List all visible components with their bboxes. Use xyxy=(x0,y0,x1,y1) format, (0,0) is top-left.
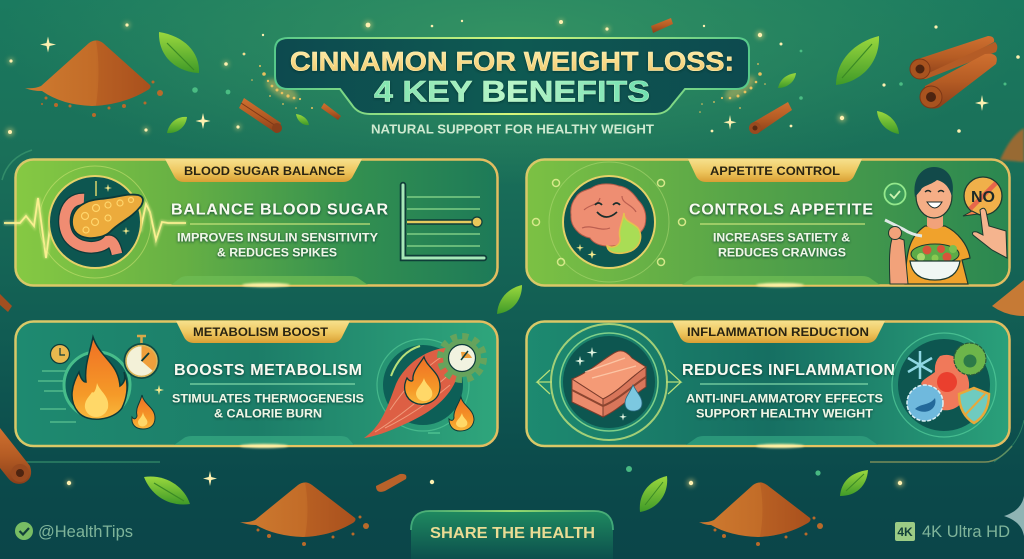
tab: APPETITE CONTROL xyxy=(710,164,840,178)
leaves xyxy=(144,32,899,512)
title line 1: CINNAMON FOR WEIGHT LOSS: xyxy=(290,47,734,77)
subtitle: NATURAL SUPPORT FOR HEALTHY WEIGHT xyxy=(371,122,654,136)
heading: REDUCES INFLAMMATION xyxy=(682,362,895,379)
tab xyxy=(688,159,862,182)
panel: inflammation reduction xyxy=(526,321,1010,448)
cinnamon pile bottom right xyxy=(699,482,823,546)
icon: heartbeat line xyxy=(4,198,186,258)
description: STIMULATES THERMOGENESIS xyxy=(172,392,364,406)
panel: blood sugar balance: & REDUCES SPIKES xyxy=(217,246,337,260)
share button: SHARE THE HEALTH xyxy=(430,525,595,542)
gold dust near title right xyxy=(699,63,766,113)
heading: BALANCE BLOOD SUGAR xyxy=(171,202,388,218)
4K badge: 4K Ultra HD xyxy=(922,523,1010,541)
icon: pancreas xyxy=(39,166,151,278)
panel: blood sugar balance xyxy=(4,159,498,287)
tab: INFLAMMATION REDUCTION xyxy=(687,325,869,339)
icon: speed lines xyxy=(38,371,76,422)
icon: small flame xyxy=(132,395,155,429)
panel: appetite control: REDUCES CRAVINGS xyxy=(718,246,846,260)
cinnamon pile bottom left xyxy=(240,482,369,546)
cinnamon pile top left xyxy=(25,40,163,117)
title banner xyxy=(275,38,749,114)
icon: fat tissue with droplet xyxy=(537,324,681,440)
panel: metabolism boost: & CALORIE BURN xyxy=(214,407,322,421)
icon: stopwatch xyxy=(124,336,160,379)
sparkle at right edge xyxy=(1004,496,1024,536)
tab xyxy=(176,321,350,343)
title line 2: 4 KEY BENEFITS xyxy=(374,76,650,109)
icon: check mark xyxy=(884,184,906,204)
cinnamon dust right edge lower xyxy=(992,280,1024,316)
heading: CONTROLS APPETITE xyxy=(689,202,873,218)
description: ANTI-INFLAMMATORY EFFECTS xyxy=(686,392,883,406)
panel: appetite control xyxy=(526,159,1010,287)
description: IMPROVES INSULIN SENSITIVITY xyxy=(177,231,378,245)
gold dust near title left xyxy=(243,53,313,109)
chart: flat glucose line xyxy=(403,185,484,258)
heading: BOOSTS METABOLISM xyxy=(174,362,362,379)
tab xyxy=(672,321,885,343)
icon: no speech bubble: NO xyxy=(971,189,995,206)
cinnamon dust right edge upper xyxy=(1000,128,1024,162)
icon: muscle with flames and gauge xyxy=(364,337,483,438)
tab xyxy=(165,159,362,182)
icon: pointing hand xyxy=(972,208,1007,258)
share button xyxy=(411,511,613,559)
icon: large flame xyxy=(64,337,130,419)
tab: BLOOD SUGAR BALANCE xyxy=(184,164,345,178)
icon: immune cells and shield xyxy=(892,333,996,437)
panel: metabolism boost xyxy=(16,321,498,448)
tab: METABOLISM BOOST xyxy=(193,325,329,339)
panel: inflammation reduction: SUPPORT HEALTHY WEIGHT xyxy=(696,407,874,421)
footer handle: @HealthTips xyxy=(38,523,133,541)
icon: brain and stomach xyxy=(532,162,686,282)
icon: small clock xyxy=(50,344,70,364)
4K badge: 4K xyxy=(897,525,913,539)
icon: person with salad xyxy=(885,167,970,284)
icon: no speech bubble xyxy=(963,177,1002,216)
description: INCREASES SATIETY & xyxy=(713,231,850,245)
